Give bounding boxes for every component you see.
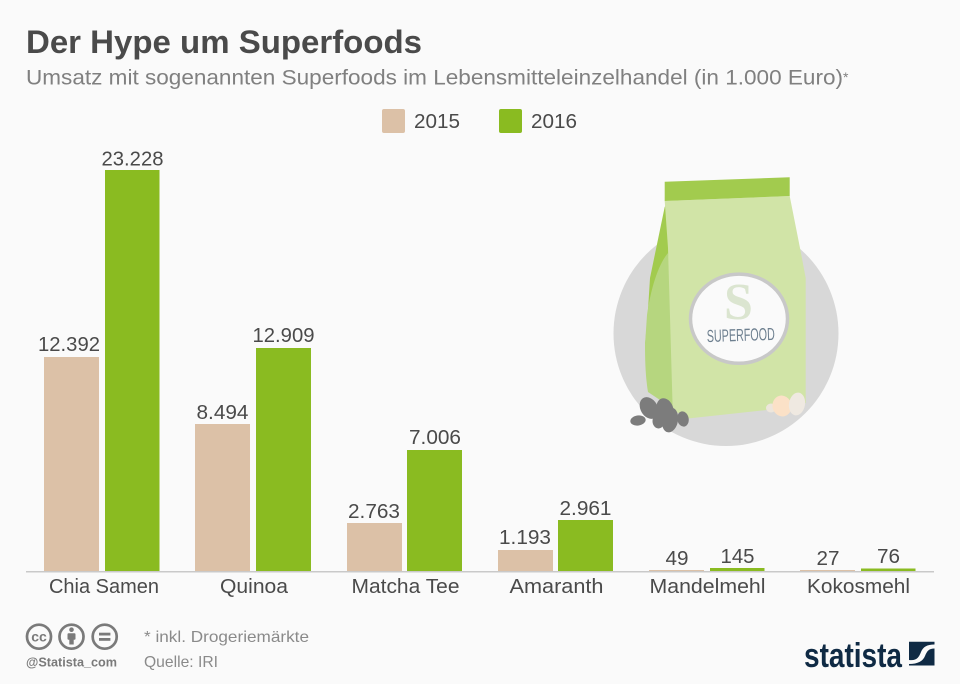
group: Amaranth: 2.961 (560, 497, 612, 520)
handle: @Statista_com (26, 656, 117, 670)
baseline (26, 571, 934, 572)
light beans (766, 391, 807, 419)
group: Chia Samen: 23.228 (102, 148, 164, 170)
group: Matcha Tee: 2.763 (348, 500, 400, 523)
group: Matcha Tee: 7.006 (409, 426, 461, 449)
group: Quinoa: 12.909 (252, 324, 314, 347)
group: Matcha Tee: Matcha Tee (352, 575, 460, 598)
dark beans (630, 394, 690, 434)
bar chart (26, 148, 934, 598)
legend: 2015 (414, 110, 460, 133)
legend (382, 109, 577, 133)
group: Quinoa: 8.494 (196, 401, 248, 424)
subtitle: Umsatz mit sogenannten Superfoods im Lebensmitteleinzelhandel (in 1.000 Euro) (26, 66, 843, 90)
group: Mandelmehl: 49 (666, 547, 688, 570)
group: Chia Samen: Chia Samen (49, 575, 159, 598)
group: Mandelmehl (649, 545, 766, 598)
logo mark (909, 642, 934, 666)
icon: no derivatives (93, 625, 117, 649)
bag top band (665, 177, 790, 201)
grey circle (614, 221, 838, 446)
icon: creative commons licence (27, 625, 117, 649)
group: Chia Samen (38, 148, 164, 598)
source: Quelle: IRI (144, 654, 218, 671)
group: Chia Samen: 12.392 (38, 333, 100, 356)
group: Kokosmehl (800, 545, 916, 598)
group: Quinoa (195, 324, 314, 598)
group: Kokosmehl: 27 (816, 547, 840, 570)
legend: 2016 (531, 110, 577, 133)
group: Quinoa: Quinoa (220, 575, 289, 598)
footnote: * inkl. Drogeriemärkte (144, 629, 309, 646)
illustration: superfood bag (614, 177, 838, 446)
bag side light (645, 253, 674, 410)
logo: statista: statista (804, 637, 903, 675)
group: Kokosmehl: Kokosmehl (807, 575, 910, 598)
icon: attribution (60, 625, 84, 649)
bag side dark (645, 205, 673, 345)
group: Matcha Tee (347, 426, 462, 598)
label badge (690, 274, 788, 363)
group: Mandelmehl: Mandelmehl (650, 575, 766, 598)
group: Amaranth: 1.193 (499, 526, 551, 549)
group: Kokosmehl: 76 (877, 545, 900, 568)
group: Amaranth (498, 497, 613, 598)
group: Amaranth: Amaranth (510, 575, 604, 598)
title: Der Hype um Superfoods (26, 24, 422, 60)
icon: cc: cc (31, 628, 47, 644)
bag front (665, 196, 806, 418)
group: Mandelmehl: 145 (720, 545, 754, 568)
label badge: S (724, 274, 753, 331)
subtitle: * (843, 69, 849, 85)
label badge: SUPERFOOD (706, 324, 775, 346)
